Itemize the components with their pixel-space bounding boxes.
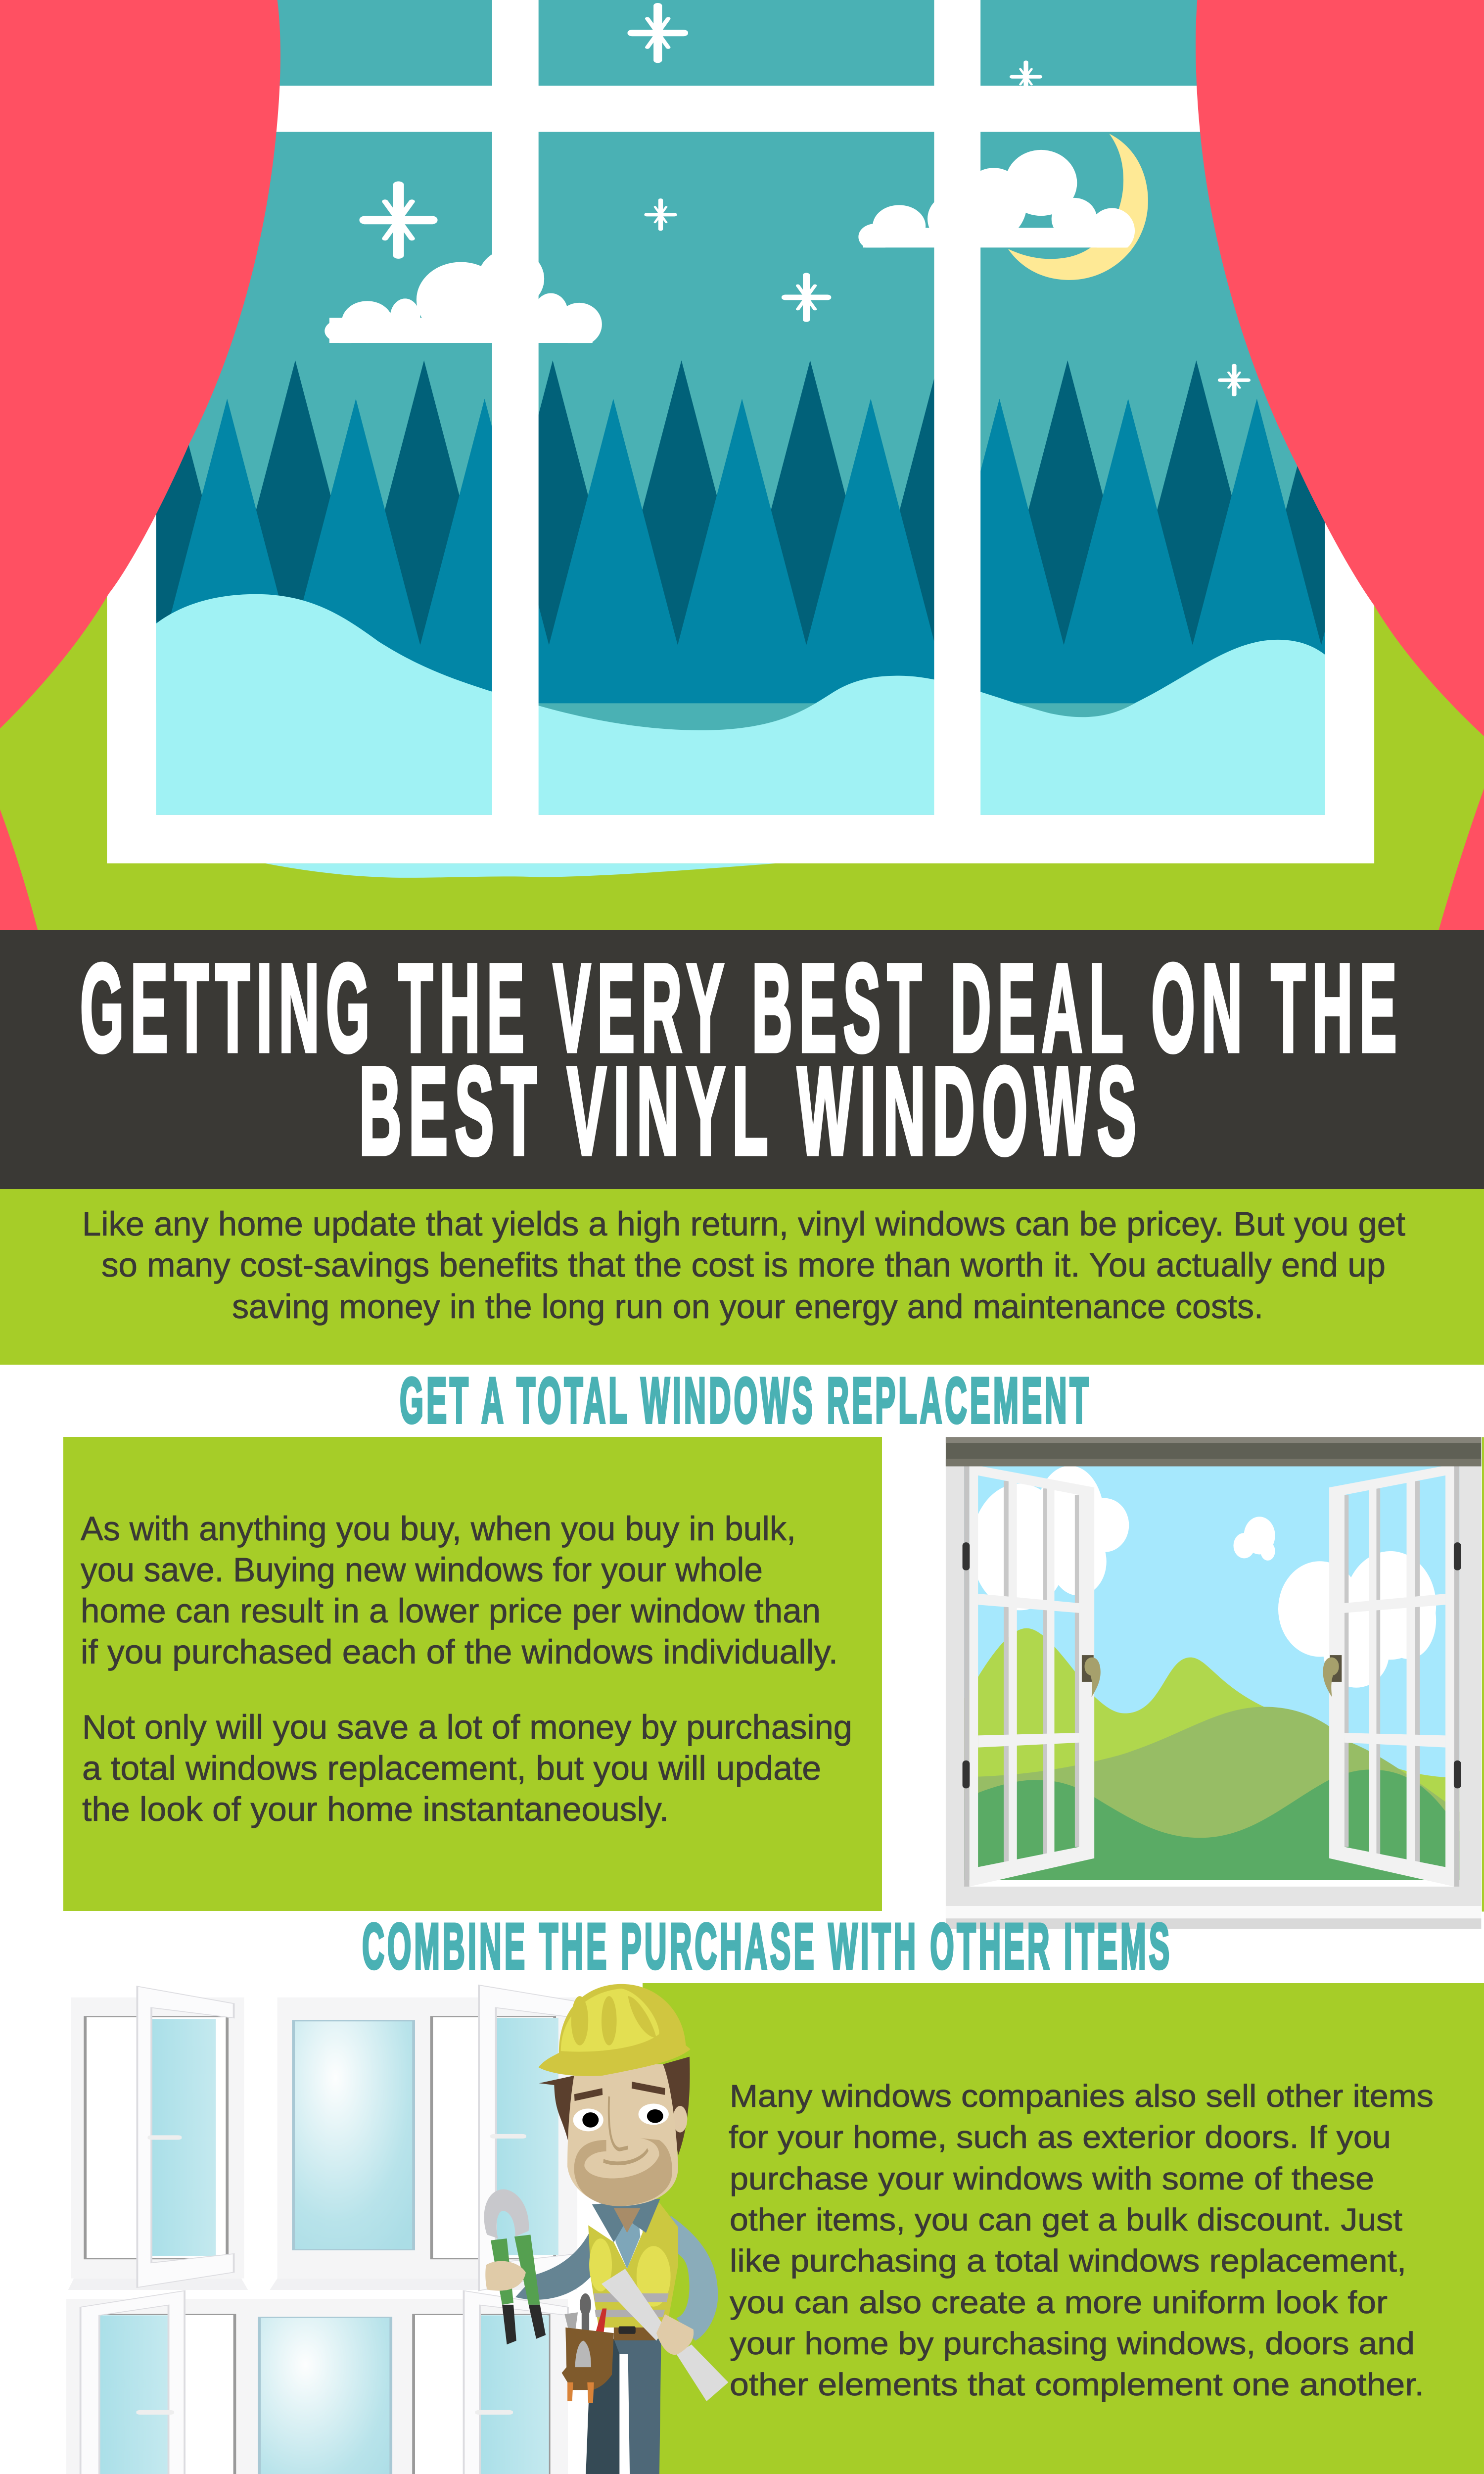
worker trousers: [550, 2339, 697, 2474]
text block: other items: for your home, such as exterior doors. If you: [729, 2119, 1391, 2155]
worker vest and shirt: [588, 2199, 678, 2340]
text block: other items: [729, 2078, 1434, 2402]
bolt cutters and hand: [484, 2189, 546, 2344]
text block: other items: purchase your windows with some of these: [730, 2161, 1374, 2196]
text block: intro: so many cost-savings benefits that the cost is more than worth it. You actually end up: [101, 1246, 1386, 1284]
forest of pine trees: [156, 360, 1325, 704]
right shutter: [1323, 1466, 1461, 1887]
panel: combine purchase text: [643, 1983, 1484, 2474]
text block: bulk savings: if you purchased each of the windows individually.: [81, 1633, 838, 1671]
panel: hero window scene: [0, 0, 1484, 931]
text block: other items: other elements that complement one another.: [730, 2367, 1424, 2402]
text block: bulk savings: As with anything you buy, when you buy in bulk,: [81, 1510, 796, 1548]
worker arms: [515, 2216, 718, 2341]
tool pouch: [562, 2293, 614, 2403]
roller blind top bar: [946, 1437, 1481, 1466]
text block: intro: Like any home update that yields a high return, vinyl windows can be pricey. But you get: [82, 1205, 1405, 1243]
panel: title banner: [0, 930, 1484, 1189]
text block: other items: you can also create a more uniform look for: [730, 2284, 1388, 2320]
text block: other items: other items, you can get a bulk discount. Just: [730, 2202, 1402, 2237]
text block: other items: like purchasing a total windows replacement,: [730, 2243, 1406, 2279]
panel: introduction: [0, 1189, 1484, 1365]
text block: bulk savings: the look of your home instantaneously.: [82, 1790, 669, 1828]
cloud right: [858, 150, 1135, 254]
rolled blueprint: [602, 2269, 728, 2401]
worker head and hat: [539, 1984, 691, 2206]
text block: intro: [82, 1205, 1405, 1326]
text block: bulk savings: [81, 1510, 852, 1828]
icon: star top right: [1010, 60, 1042, 93]
text block: bulk savings: home can result in a lower price per window than: [81, 1592, 821, 1630]
window unit top left: [68, 1986, 248, 2290]
text block: other items: Many windows companies also sell other items: [730, 2078, 1434, 2114]
title: [80, 939, 1403, 1181]
text block: intro: saving money in the long run on your energy and maintenance costs.: [232, 1287, 1263, 1326]
icon: star top centre: [628, 3, 688, 63]
panel: total replacement text: [63, 1437, 882, 1911]
icon: star middle small: [644, 198, 677, 231]
red curtain left: [0, 0, 280, 931]
icon: star left large: [360, 182, 437, 259]
text block: bulk savings: a total windows replacement, but you will update: [82, 1749, 821, 1787]
icon: star right: [1218, 364, 1251, 396]
illustration: open window with hills: [946, 1437, 1484, 1929]
window sill: [946, 1906, 1481, 1929]
illustration: construction worker: [484, 1984, 728, 2474]
window unit bottom: [61, 2291, 598, 2474]
icon: star middle: [782, 273, 831, 322]
illustration: row of vinyl windows: [61, 1985, 598, 2474]
text block: other items: your home by purchasing windows, doors and: [730, 2326, 1415, 2361]
cloud left: [325, 249, 602, 346]
icon: crescent moon: [1008, 134, 1148, 280]
text block: bulk savings: Not only will you save a lot of money by purchasing: [82, 1708, 852, 1746]
red curtain right: [1196, 0, 1484, 931]
text block: bulk savings: you save. Buying new windows for your whole: [81, 1551, 763, 1589]
left shutter: [963, 1466, 1101, 1887]
window unit top middle: [270, 1985, 577, 2291]
window muntin bars: [156, 0, 1325, 815]
snowy hills: [156, 594, 1325, 815]
